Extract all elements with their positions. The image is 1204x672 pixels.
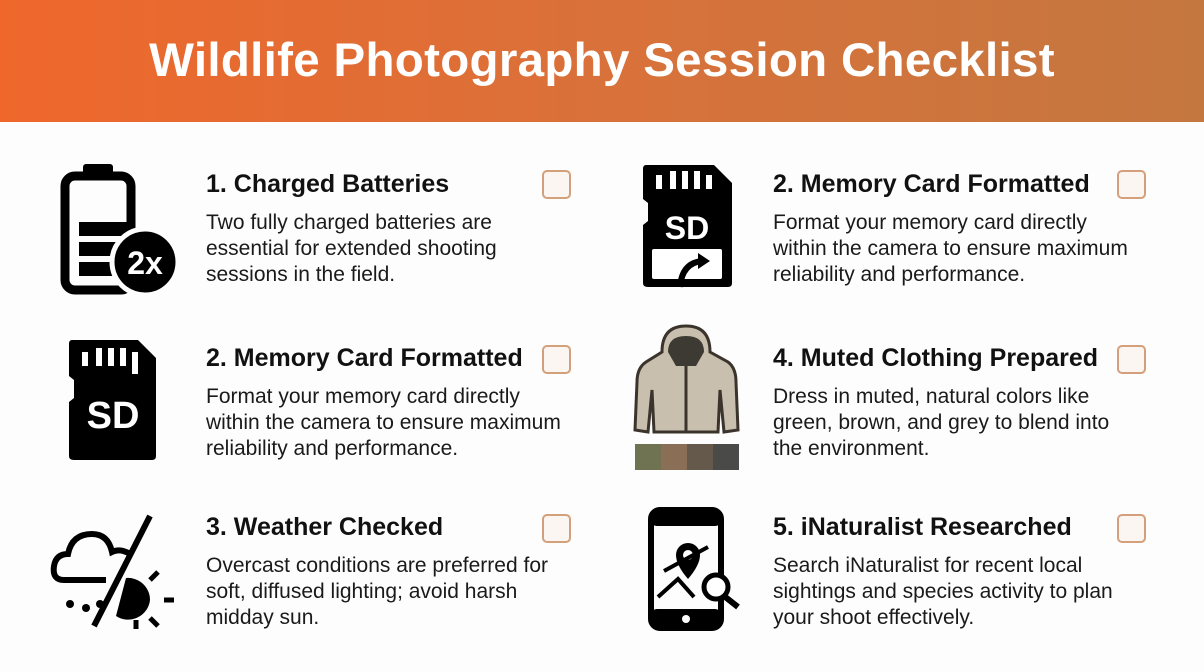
item 4: Dress in muted, natural colors like: [773, 385, 1089, 408]
icon: SD card: [69, 340, 156, 460]
item 2 left: 2. Memory Card Formatted: [206, 344, 523, 372]
icon: SD card formatted: SD: [665, 210, 709, 246]
icon: phone map search: [648, 507, 740, 631]
checkbox 3: [542, 514, 571, 543]
item 2 right: reliability and performance.: [773, 263, 1025, 286]
item 3: [206, 513, 548, 629]
item 4: the environment.: [773, 437, 929, 460]
checkbox 2 right: [1117, 170, 1146, 199]
icon: battery 2x: [60, 164, 176, 294]
item 1: sessions in the field.: [206, 263, 395, 286]
item 5: sightings and species activity to plan: [773, 580, 1113, 603]
item 1: Two fully charged batteries are: [206, 211, 492, 234]
item 5: [773, 513, 1113, 629]
item 2 left: [206, 344, 561, 460]
item 2 right: [773, 170, 1128, 286]
item 1: essential for extended shooting: [206, 237, 497, 260]
item 4: green, brown, and grey to blend into: [773, 411, 1109, 434]
item 5: your shoot effectively.: [773, 606, 974, 629]
checkbox 5: [1117, 514, 1146, 543]
item 2 right: 2. Memory Card Formatted: [773, 170, 1090, 198]
item 3: midday sun.: [206, 606, 319, 629]
icon: SD card formatted: [643, 165, 732, 288]
item 3: Overcast conditions are preferred for: [206, 554, 548, 577]
item 2 left: reliability and performance.: [206, 437, 458, 460]
item 4: 4. Muted Clothing Prepared: [773, 344, 1098, 372]
item 2 right: within the camera to ensure maximum: [773, 237, 1128, 260]
checkbox 1: [542, 170, 571, 199]
item 2 left: within the camera to ensure maximum: [206, 411, 561, 434]
icon: battery 2x: 2x: [127, 245, 163, 281]
item 5: 5. iNaturalist Researched: [773, 513, 1072, 541]
item 2 left: Format your memory card directly: [206, 385, 520, 408]
item 5: Search iNaturalist for recent local: [773, 554, 1082, 577]
checkbox 2 left: [542, 345, 571, 374]
icon: SD card: SD: [87, 395, 139, 437]
item 3: 3. Weather Checked: [206, 513, 443, 541]
item 1: [206, 170, 497, 286]
header banner: [0, 0, 1204, 122]
item 2 right: Format your memory card directly: [773, 211, 1087, 234]
icon: weather: [50, 514, 174, 629]
item 4: [773, 344, 1109, 460]
item 1: 1. Charged Batteries: [206, 170, 449, 198]
title: Wildlife Photography Session Checklist: [149, 34, 1055, 87]
checkbox 4: [1117, 345, 1146, 374]
icon: jacket with color swatches: [633, 324, 740, 470]
item 3: soft, diffused lighting; avoid harsh: [206, 580, 517, 603]
